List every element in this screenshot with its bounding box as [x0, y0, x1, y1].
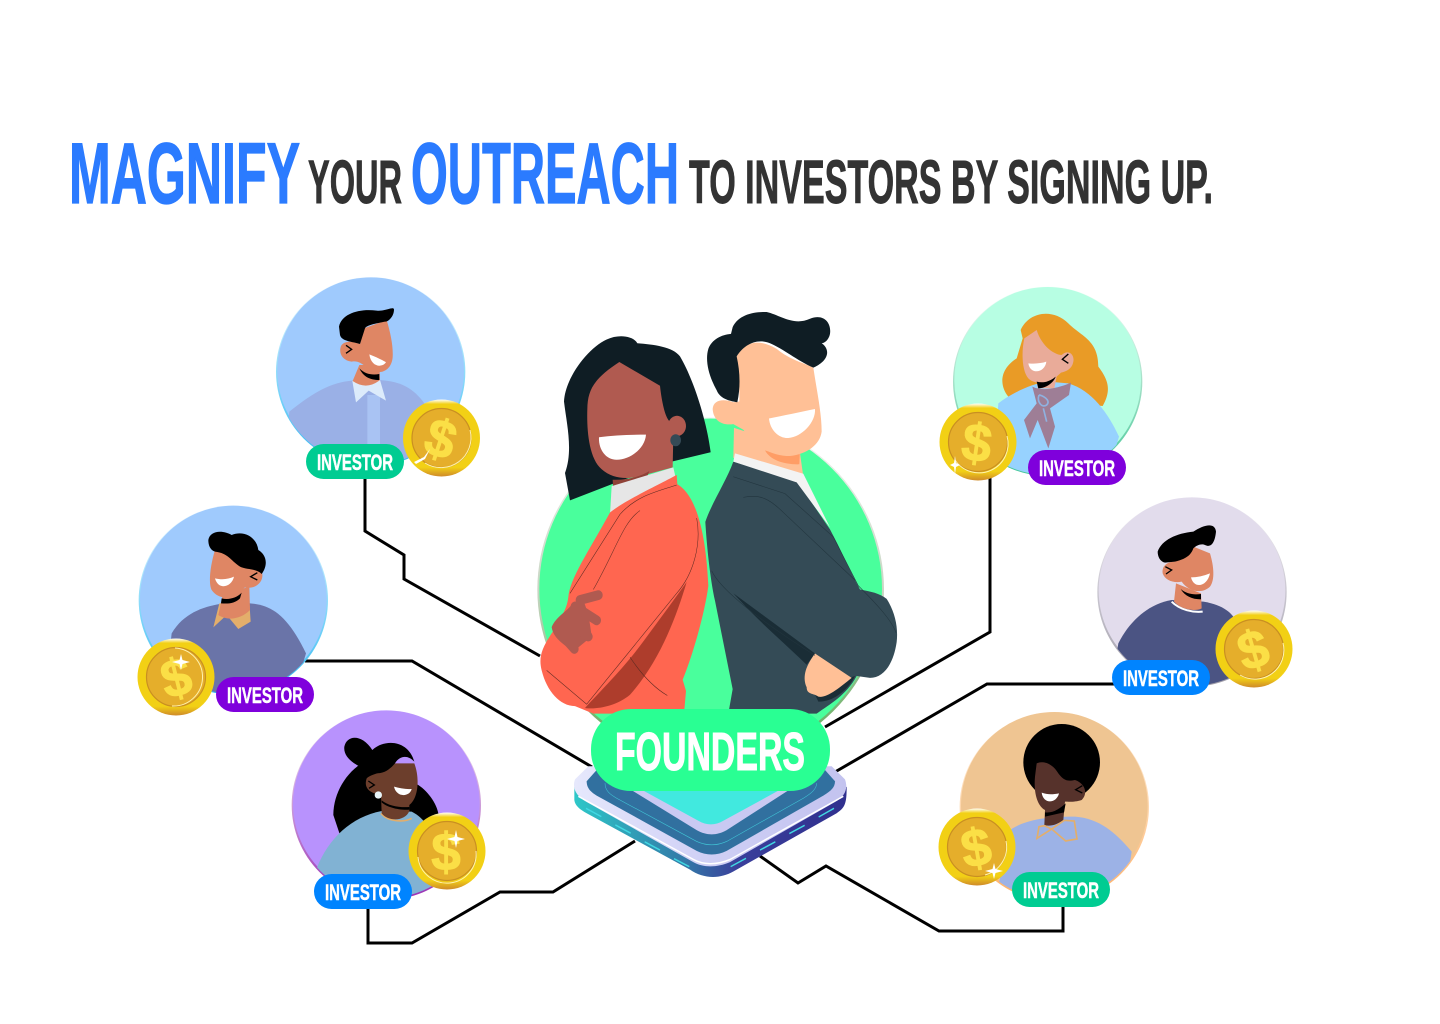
coin — [1216, 610, 1292, 688]
badge: investor — [1012, 872, 1110, 907]
title: MAGNIFY — [69, 126, 300, 222]
investor card: middle left — [138, 505, 328, 716]
badge: investor: INVESTOR — [317, 450, 393, 475]
coin — [940, 404, 1016, 480]
coin: $ — [957, 817, 996, 880]
coin — [938, 808, 1016, 886]
avatar: woman with orange hair and scarf — [953, 287, 1142, 493]
badge: investor — [1028, 450, 1126, 485]
platform base — [574, 766, 847, 877]
badge: investor — [314, 874, 412, 909]
investor card: bottom left — [292, 710, 486, 912]
badge: investor — [1112, 660, 1210, 695]
avatar: man in light blue shirt — [276, 277, 465, 477]
character: male founder — [705, 312, 897, 714]
investor card: middle right — [1097, 497, 1292, 697]
character: female founder — [540, 336, 711, 714]
coin — [138, 638, 214, 716]
badge: investor — [216, 677, 314, 712]
badge: investor: INVESTOR — [227, 683, 303, 708]
coin: $ — [1231, 618, 1276, 683]
founders illustration — [537, 312, 897, 877]
backdrop circle — [537, 417, 884, 762]
coin: $ — [155, 646, 198, 711]
avatar: man in navy sweater — [1097, 497, 1287, 697]
avatar: man with afro — [960, 712, 1149, 892]
title: YOUR — [308, 148, 402, 216]
avatar: man in slate sweater — [139, 505, 328, 707]
coin — [408, 812, 486, 890]
badge: investor: INVESTOR — [325, 880, 401, 905]
founders label pill — [591, 709, 830, 791]
connector lines from investors to founders — [305, 478, 1115, 943]
avatar: woman with hair bun — [292, 710, 481, 912]
badge: investor: INVESTOR — [1039, 456, 1115, 481]
badge: investor: INVESTOR — [1123, 666, 1199, 691]
investor card: top left — [276, 277, 480, 479]
title — [69, 126, 1213, 222]
coin: $ — [417, 407, 464, 472]
badge: investor: INVESTOR — [1023, 878, 1099, 903]
coin — [403, 400, 480, 476]
founders label pill: FOUNDERS — [615, 722, 805, 782]
investor card: top right — [940, 287, 1142, 493]
coin: $ — [958, 412, 995, 475]
badge: investor — [306, 444, 404, 479]
title: OUTREACH — [411, 126, 679, 222]
investor card: bottom right — [938, 712, 1149, 918]
coin: $ — [431, 823, 461, 882]
